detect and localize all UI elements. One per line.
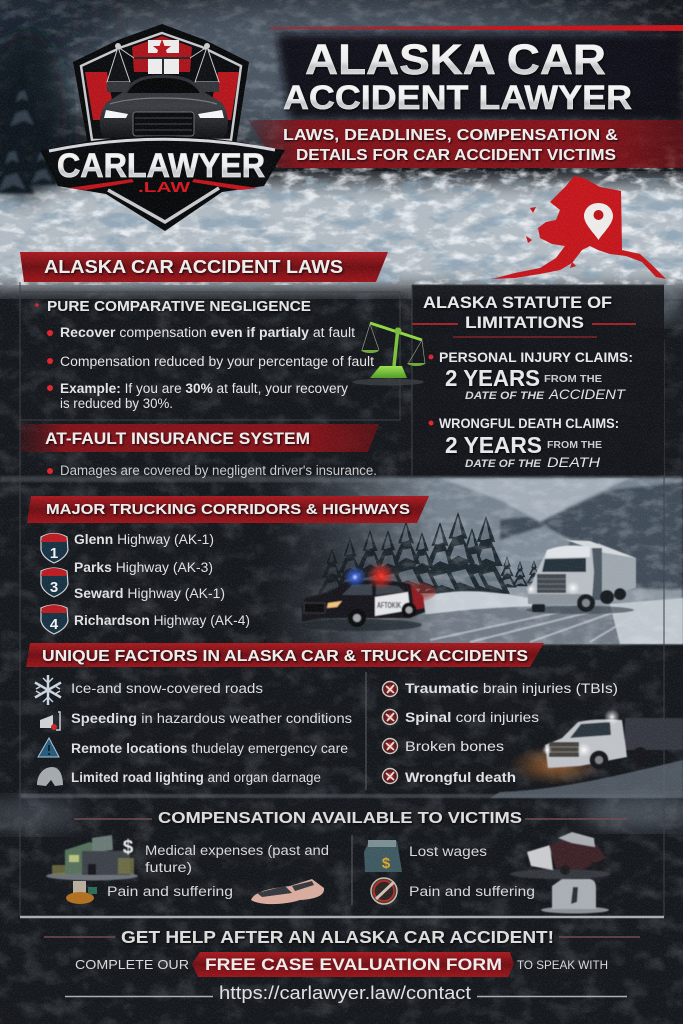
heading: major trucking corridors xyxy=(27,496,429,523)
list: unique factors, road hazards: Speeding in hazardous weather conditions xyxy=(71,711,352,726)
list: unique factors, injuries xyxy=(382,680,618,785)
list: unique factors, road hazards: Remote locations thudelay emergency care xyxy=(71,741,348,756)
text block: personal injury claims xyxy=(428,349,633,402)
heading: at-fault insurance system: AT-FAULT INSURANCE SYSTEM xyxy=(45,430,310,448)
text block: wrongful death claims: DEATH xyxy=(547,454,601,470)
list: compensation right xyxy=(364,832,610,914)
title: ACCIDENT LAWYER xyxy=(283,79,632,117)
list: highways: Glenn Highway (AK-1) xyxy=(74,532,214,547)
heading: statute of limitations: LIMITATIONS xyxy=(465,313,584,332)
text block: personal injury claims: 2 YEARS xyxy=(445,365,540,391)
illustration: police car: AFTOKIK xyxy=(377,601,401,610)
text block: personal injury claims: ACCIDENT xyxy=(548,386,627,402)
panel: statute of limitations xyxy=(412,285,664,478)
text block: wrongful death claims xyxy=(428,415,619,470)
icon: route 4 shield xyxy=(41,605,68,634)
list: unique factors, road hazards: Limited road lighting and organ darnage xyxy=(71,770,321,785)
text block: personal injury claims: FROM THE xyxy=(544,373,602,385)
logo banner: CARLAWYER xyxy=(57,147,265,185)
text block: pure comparative negligence: Compensation reduced by your percentage of fault xyxy=(60,354,374,369)
list: compensation left xyxy=(46,835,329,904)
button: free case evaluation form: FREE CASE EVALUATION FORM xyxy=(205,955,502,974)
list: unique factors, injuries: Spinal cord injuries xyxy=(405,709,539,725)
icon: broken bone xyxy=(382,738,398,754)
list: unique factors, injuries: Wrongful death xyxy=(405,769,516,785)
icon: warning triangle xyxy=(38,738,59,757)
heading: Alaska car accident laws xyxy=(20,252,388,282)
logo banner xyxy=(44,136,279,222)
heading: at-fault insurance system xyxy=(20,424,379,452)
text block: personal injury claims: PERSONAL INJURY CLAIMS: xyxy=(439,349,633,365)
call to action: GET HELP AFTER AN ALASKA CAR ACCIDENT! xyxy=(121,927,554,947)
text block: pure comparative negligence: Recover compensation even if partialy at fault xyxy=(60,325,355,340)
panel: compensation frame xyxy=(20,819,664,917)
heading: unique factors: UNIQUE FACTORS IN ALASKA CAR & TRUCK ACCIDENTS xyxy=(42,648,528,665)
logo scales xyxy=(107,43,219,92)
call to action xyxy=(44,927,640,1003)
text block: wrongful death claims: WRONGFUL DEATH CLAIMS: xyxy=(439,415,619,431)
icon: route 3 shield: 3 xyxy=(50,579,58,596)
call to action: https://carlawyer.law/contact xyxy=(219,983,471,1003)
list: compensation left: future) xyxy=(145,860,192,875)
list: highways: Richardson Highway (AK-4) xyxy=(74,613,250,628)
illustration: semi truck on snowy road xyxy=(526,540,636,614)
icon: hospital building: $ xyxy=(123,837,134,858)
icon: route 4 shield: 4 xyxy=(50,616,59,633)
icon: route 3 shield xyxy=(41,568,68,597)
call to action: TO SPEAK WITH xyxy=(517,958,608,972)
icon: bandaged limb xyxy=(251,879,324,904)
icon: speeding sign xyxy=(40,712,60,730)
icon: wrongful death xyxy=(382,768,398,784)
logo car xyxy=(100,75,228,138)
icon: wrecked car xyxy=(510,832,610,879)
list: unique factors, injuries: Broken bones xyxy=(405,738,504,754)
icon: hospital building xyxy=(46,835,138,880)
illustration: police car xyxy=(298,562,436,631)
list: compensation right: Lost wages xyxy=(409,844,487,859)
text block: insurance: Damages are covered by negligent driver's insurance. xyxy=(60,463,377,478)
red accent line xyxy=(270,25,683,31)
map: Alaska with location pin xyxy=(492,176,666,279)
list: highways: Parks Highway (AK-3) xyxy=(74,560,213,575)
logo: CarLawyer shield xyxy=(40,24,285,231)
text block: pure comparative negligence: is reduced by 30%. xyxy=(60,396,173,411)
icon: green scales of justice xyxy=(352,323,425,386)
icon: gravestone xyxy=(541,879,609,914)
illustration: truck at night xyxy=(490,709,683,798)
list: compensation left: Pain and suffering xyxy=(107,884,233,899)
text block: personal injury claims: DATE OF THE xyxy=(465,390,545,402)
icon: location pin xyxy=(584,203,613,240)
icon: brain injury xyxy=(382,682,398,696)
list: unique factors, road hazards: Ice-and snow-covered roads xyxy=(71,681,263,696)
divider: unique factors xyxy=(365,672,367,790)
panel: laws frame xyxy=(20,282,664,917)
text block: pure comparative negligence: PURE COMPARATIVE NEGLIGENCE xyxy=(47,299,311,315)
icon: prohibited xyxy=(371,878,397,904)
heading: compensation available: COMPENSATION AVAILABLE TO VICTIMS xyxy=(158,810,522,827)
icon: route 1 shield: 1 xyxy=(50,545,58,562)
list: highways xyxy=(41,532,250,634)
scene: snowy mountain road xyxy=(260,478,683,644)
text block: wrongful death claims: FROM THE xyxy=(547,439,602,451)
list: highways: Seward Highway (AK-1) xyxy=(74,586,225,601)
call to action: COMPLETE OUR xyxy=(75,957,189,972)
heading: major trucking corridors: MAJOR TRUCKING CORRIDORS & HIGHWAYS xyxy=(46,501,410,518)
icon: snowflake xyxy=(35,675,61,705)
logo banner: .LAW xyxy=(138,179,191,196)
heading: statute of limitations: ALASKA STATUTE OF xyxy=(423,293,612,312)
button: free case evaluation form xyxy=(192,952,514,977)
icon: medical supplies xyxy=(66,881,97,904)
subtitle band: DETAILS FOR CAR ACCIDENT VICTIMS xyxy=(296,147,616,164)
logo flag xyxy=(132,36,192,74)
title: ALASKA CAR xyxy=(305,36,606,84)
icon: cash box xyxy=(364,840,402,872)
text block: wrongful death claims: DATE OF THE xyxy=(465,458,542,470)
subtitle band: LAWS, DEADLINES, COMPENSATION & xyxy=(283,127,618,144)
list: unique factors, road hazards xyxy=(35,675,352,786)
icon: route 1 shield xyxy=(41,534,68,563)
text block: wrongful death claims: 2 YEARS xyxy=(445,432,542,458)
list: compensation right: Pain and suffering xyxy=(409,884,535,899)
subtitle band xyxy=(248,120,683,168)
heading: Alaska car accident laws: ALASKA CAR ACCIDENT LAWS xyxy=(44,257,343,277)
title xyxy=(283,36,632,117)
text block: pure comparative negligence: Example: If you are 30% at fault, your recovery xyxy=(60,381,348,396)
icon: spinal injury xyxy=(382,710,398,724)
icon: snowy dome xyxy=(37,767,63,786)
list: compensation left: Medical expenses (past and xyxy=(145,843,329,858)
text block: pure comparative negligence xyxy=(35,299,374,411)
list: unique factors, injuries: Traumatic brain injuries (TBIs) xyxy=(405,680,618,696)
heading: unique factors xyxy=(26,643,544,667)
icon: cash box: $ xyxy=(382,855,391,872)
heading: statute of limitations xyxy=(423,293,612,332)
